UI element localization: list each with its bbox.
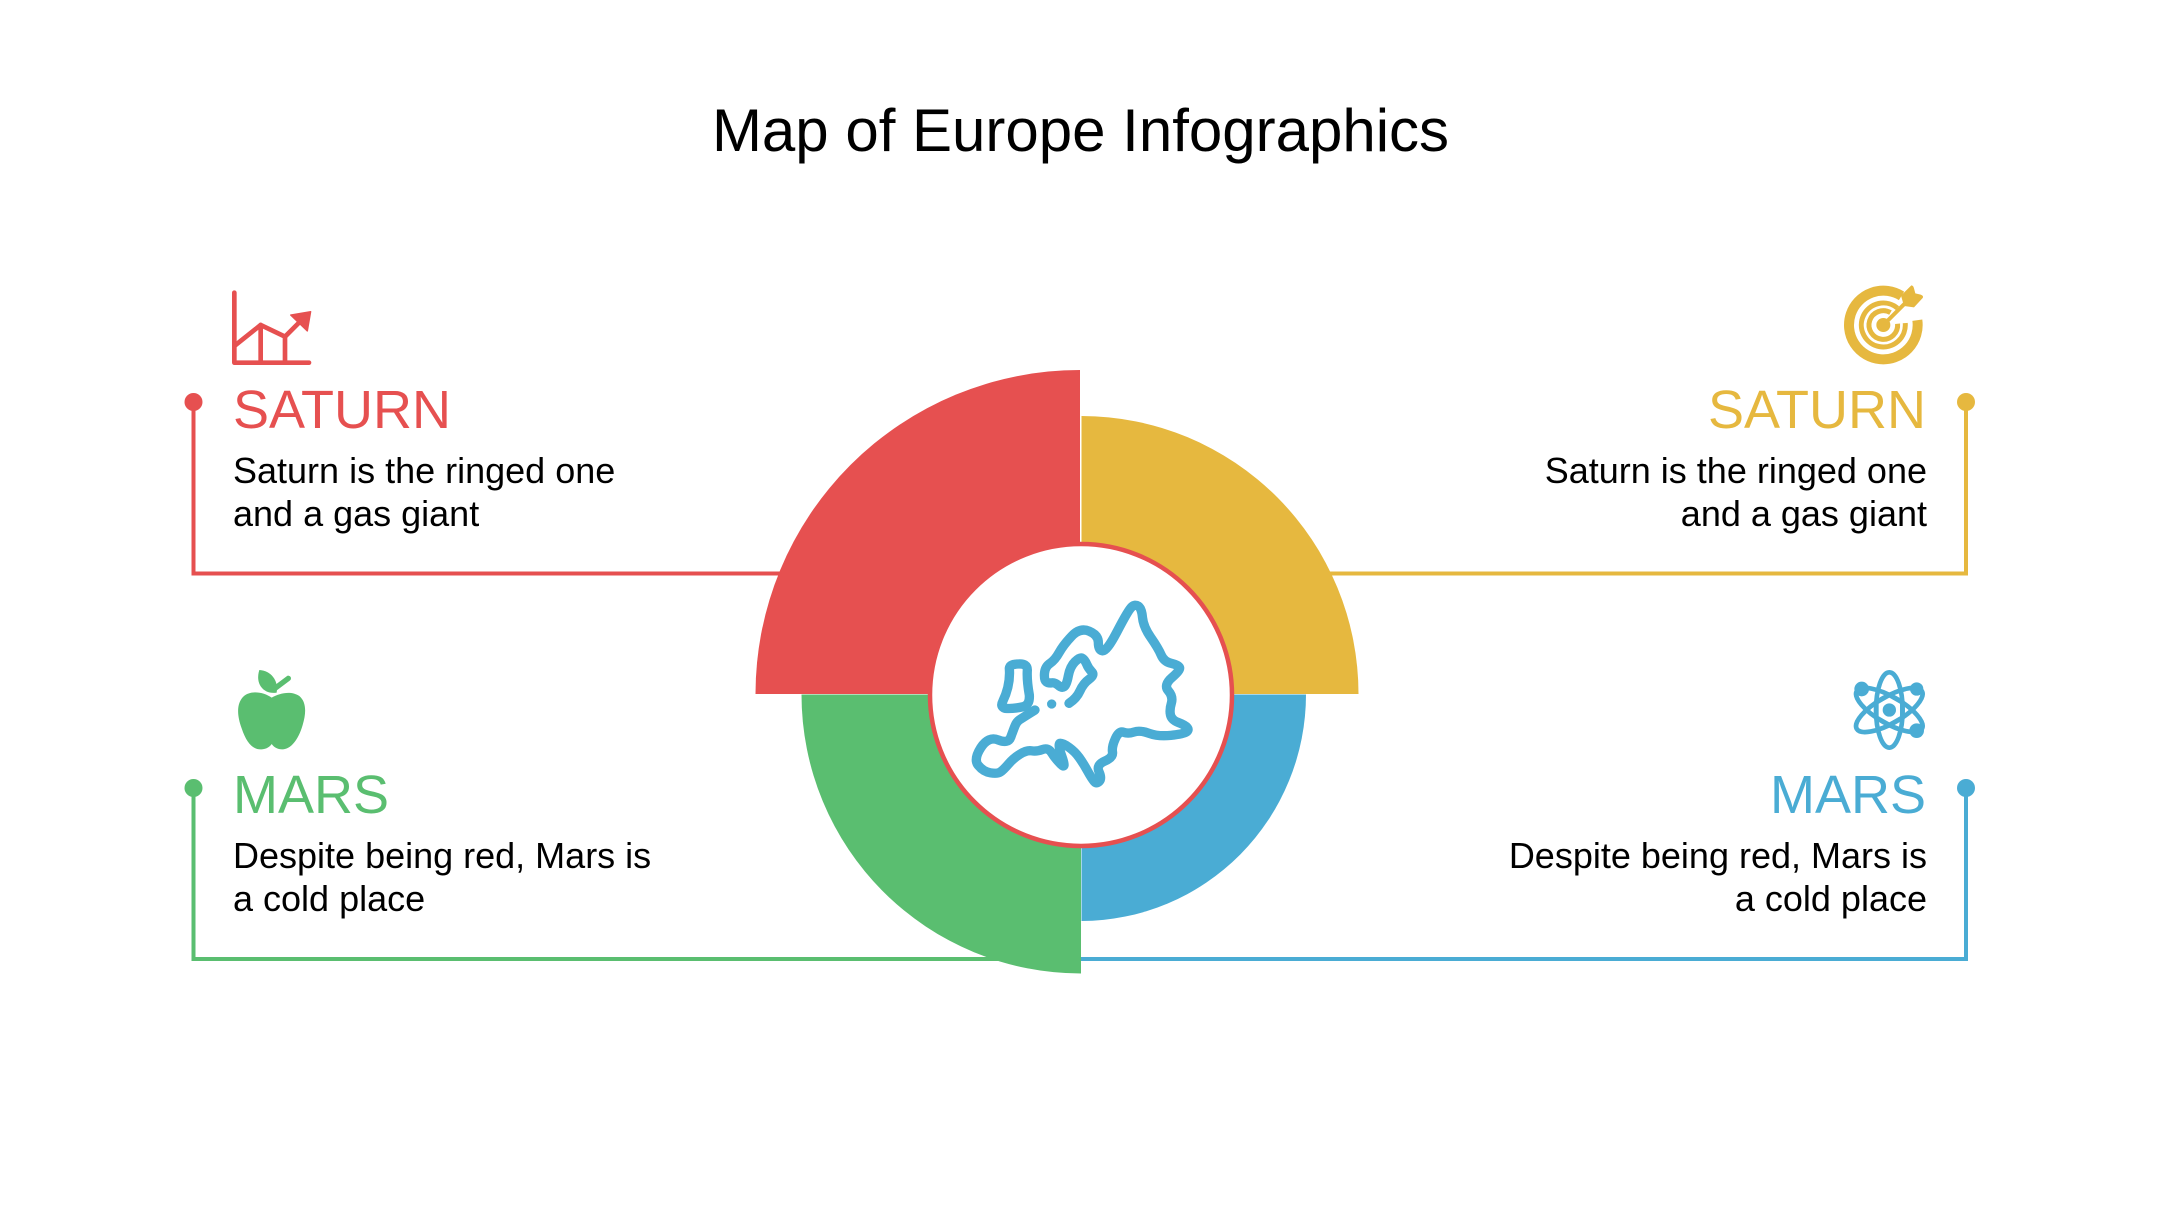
panel: bottom left bbox=[233, 670, 651, 919]
heading: MARS bbox=[1770, 765, 1926, 825]
text block: Despite being red, Mars is bbox=[1509, 835, 1927, 876]
text block: and a gas giant bbox=[1681, 493, 1927, 534]
connector: blue bbox=[1081, 779, 1975, 959]
text block: Despite being red, Mars is bbox=[233, 835, 651, 876]
donut chart bbox=[756, 370, 1358, 974]
icon: growth chart bbox=[234, 293, 311, 363]
panel: top right bbox=[1545, 285, 1927, 534]
title: Map of Europe Infographics bbox=[712, 97, 1449, 164]
segment: blue bbox=[1082, 694, 1306, 921]
connector: red bbox=[184, 393, 800, 574]
text block: Saturn is the ringed one bbox=[233, 450, 615, 491]
panel: bottom right bbox=[1509, 672, 1929, 919]
segment: yellow bbox=[1082, 416, 1358, 694]
heading: MARS bbox=[233, 765, 389, 825]
text block: and a gas giant bbox=[233, 493, 479, 534]
icon: apple bbox=[238, 670, 305, 749]
text block: Saturn is the ringed one bbox=[1545, 450, 1927, 491]
heading: SATURN bbox=[1708, 380, 1926, 440]
connector: green bbox=[184, 779, 1040, 959]
segment: red bbox=[756, 370, 1080, 694]
text block: a cold place bbox=[1735, 878, 1927, 919]
panel: top left bbox=[233, 293, 615, 534]
icon: atom bbox=[1850, 672, 1929, 748]
connector: yellow bbox=[1320, 393, 1975, 574]
icon: map of Europe bbox=[976, 605, 1188, 783]
heading: SATURN bbox=[233, 380, 451, 440]
segment: green bbox=[802, 694, 1081, 974]
center circle bbox=[930, 544, 1232, 846]
icon: target bbox=[1849, 285, 1923, 359]
text block: a cold place bbox=[233, 878, 425, 919]
